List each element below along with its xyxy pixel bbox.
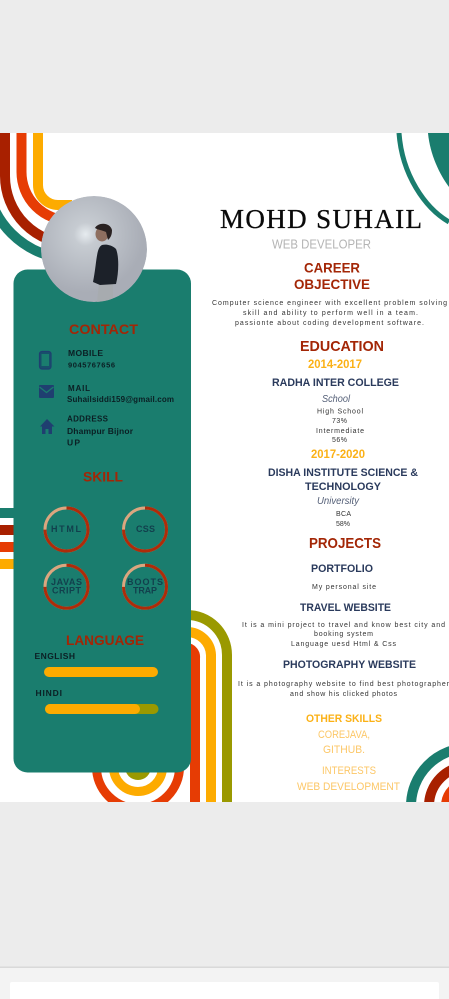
skill ring: javascript <box>45 565 88 608</box>
section: projects: PORTFOLIO <box>311 563 373 575</box>
heading: language: LANGUAGE <box>66 632 144 648</box>
section: education: RADHA INTER COLLEGE <box>272 377 399 389</box>
section: other skills and interests: WEB DEVELOPMENT <box>297 781 400 793</box>
panel: sidebar <box>14 270 191 772</box>
section: projects: It is a mini project to travel and know best city and <box>242 622 445 629</box>
text: mobile: MOBILE <box>68 348 103 358</box>
text: address <box>67 415 134 448</box>
text: mobile: 9045767656 <box>68 361 115 370</box>
skill ring: bootstrap: BOOTS <box>127 577 163 587</box>
resume sheet <box>0 133 449 802</box>
text: address: ADDRESS <box>67 415 109 424</box>
skill ring: javascript: CRIPT <box>52 586 82 596</box>
decoration: bottom-centre rings <box>92 770 184 802</box>
text: address: UP <box>67 438 80 448</box>
section: career objective <box>212 260 447 327</box>
section: career objective: passionte about coding development software. <box>235 320 424 327</box>
text: mobile <box>68 348 115 370</box>
decoration: right-of-panel arches <box>187 615 227 802</box>
name: MOHD SUHAIL <box>220 204 422 234</box>
text: mail: MAIL <box>68 384 90 393</box>
icon: home <box>40 419 54 434</box>
section: education: High School <box>317 408 363 416</box>
skill ring: css <box>124 508 166 551</box>
section: education: School <box>322 394 351 405</box>
section: education: TECHNOLOGY <box>305 481 382 493</box>
decoration: bottom-right arcs <box>406 746 449 802</box>
section: career objective: Computer science engineer with excellent problem solving <box>212 300 447 307</box>
section: other skills and interests <box>297 713 400 793</box>
section: career objective: CAREER <box>304 260 360 276</box>
skill ring: bootstrap: TRAP <box>133 586 157 596</box>
section: education: Intermediate <box>316 428 364 435</box>
icon: mail <box>39 385 54 398</box>
skill ring: html <box>45 508 88 551</box>
section: career objective: skill and ability to perform well in a team. <box>243 310 418 317</box>
decoration: top-right arcs <box>399 133 449 222</box>
section: projects: PROJECTS <box>309 535 381 552</box>
section: projects: My personal site <box>312 584 376 591</box>
skill ring: bootstrap <box>124 565 166 608</box>
section: career objective: OBJECTIVE <box>294 276 370 292</box>
section: education: DISHA INSTITUTE SCIENCE & <box>268 467 418 479</box>
heading: skill: SKILL <box>83 469 123 485</box>
section: education: BCA <box>336 511 351 518</box>
section: education <box>268 338 418 528</box>
heading: contact: CONTACT <box>69 321 138 337</box>
section: other skills and interests: GITHUB. <box>323 744 365 756</box>
section: other skills and interests: INTERESTS <box>322 765 376 777</box>
section: projects: PHOTOGRAPHY WEBSITE <box>283 659 416 671</box>
section: other skills and interests: OTHER SKILLS <box>306 713 382 725</box>
section: education: 73% <box>332 418 347 425</box>
section: projects <box>238 535 449 698</box>
section: projects: Language uesd Html & Css <box>291 641 396 648</box>
text: address: Dhampur Bijnor <box>67 426 134 436</box>
section: education: 58% <box>336 521 350 528</box>
icon: phone <box>40 352 51 369</box>
section: education: EDUCATION <box>300 338 384 355</box>
section: education: 2014-2017 <box>308 359 362 371</box>
section: education: 2017-2020 <box>311 449 365 461</box>
language bar: hindi <box>36 688 158 714</box>
section: education: University <box>317 496 360 507</box>
skill ring: css: CSS <box>136 524 155 534</box>
language bar: english <box>34 651 158 677</box>
text: mail: Suhailsiddi159@gmail.com <box>67 395 174 404</box>
section: education: 56% <box>332 437 347 444</box>
language bar: english: ENGLISH <box>34 651 75 661</box>
decoration: left stripes <box>0 508 14 569</box>
section: projects: TRAVEL WEBSITE <box>300 602 391 614</box>
section: projects: and show his clicked photos <box>290 691 398 698</box>
skill ring: javascript: JAVAS <box>51 577 82 587</box>
text: mail <box>67 384 174 404</box>
decoration: top-left arcs <box>0 133 73 259</box>
skill ring: html: HTML <box>51 524 82 534</box>
language bar: hindi: HINDI <box>36 688 62 698</box>
section: projects: It is a photography website to find best photographer <box>238 681 449 688</box>
section: projects: booking system <box>314 631 373 638</box>
job title: WEB DEVELOPER <box>272 238 371 252</box>
bottom card <box>0 966 449 999</box>
section: other skills and interests: COREJAVA, <box>318 729 370 741</box>
profile photo <box>41 196 147 302</box>
